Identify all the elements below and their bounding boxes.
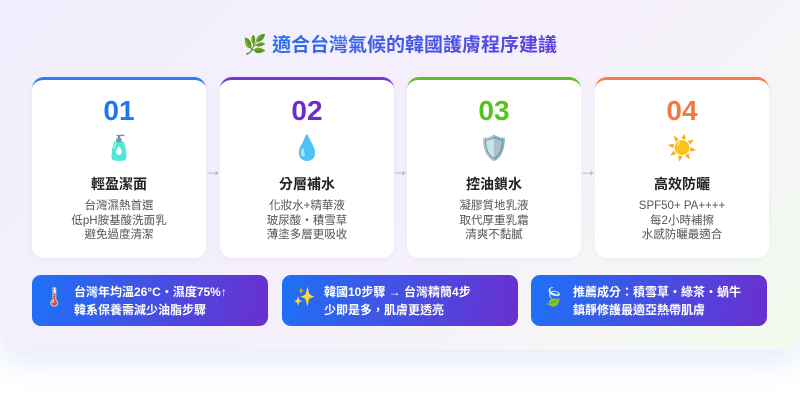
- card 04: 高效防曬: [654, 176, 710, 192]
- arrow: →: [391, 160, 409, 180]
- arrow: →: [204, 160, 222, 180]
- card 04: ☀️: [667, 134, 697, 162]
- tip: ingredients: 🍃: [542, 287, 564, 307]
- tip: ingredients: 鎮靜修護最適亞熱帶肌膚: [573, 303, 705, 317]
- card 04: SPF50+ PA++++: [639, 200, 725, 212]
- arrow: →: [579, 160, 597, 180]
- card 02: 💧: [292, 134, 322, 162]
- tip: climate: 🌡️: [43, 287, 65, 307]
- tip: climate: [32, 275, 268, 326]
- card 01: [32, 77, 206, 258]
- card 03: 取代厚重乳霜: [460, 215, 528, 227]
- tip: climate: 韓系保養需減少油脂步驟: [74, 303, 206, 317]
- card 02: 薄塗多層更吸收: [267, 229, 347, 241]
- card 03: 03: [478, 95, 510, 126]
- card 03: [407, 77, 581, 258]
- tip: steps: 韓國10步驟 → 台灣精簡4步: [324, 285, 471, 299]
- card 02: [220, 77, 394, 258]
- tip: steps: ✨: [293, 287, 315, 307]
- card 03: 凝膠質地乳液: [460, 200, 528, 212]
- card 03: 🛡️: [479, 134, 509, 162]
- card 01: 避免過度清潔: [84, 229, 154, 241]
- card 01: 台灣濕熱首選: [84, 200, 154, 212]
- card 02: 分層補水: [279, 176, 335, 192]
- card 04: 每2小時補擦: [650, 215, 714, 227]
- card 01: 🧴: [104, 134, 134, 162]
- card 03: 控油鎖水: [466, 176, 522, 192]
- title: 🌿 適合台灣氣候的韓國護膚程序建議: [243, 35, 557, 56]
- card 01: 01: [103, 95, 135, 126]
- card 01: 輕盈潔面: [91, 176, 147, 192]
- card 02: 02: [291, 95, 323, 126]
- tip: ingredients: 推薦成分：積雪草・綠茶・蝸牛: [573, 285, 741, 299]
- card 04: 水感防曬最適合: [642, 229, 722, 241]
- card 04: [595, 77, 769, 258]
- tip: ingredients: [531, 275, 767, 326]
- card 01: 低pH胺基酸洗面乳: [71, 215, 167, 227]
- tip: climate: 台灣年均溫26°C・濕度75%↑: [74, 285, 227, 299]
- card 04: 04: [666, 95, 698, 126]
- tip: steps: 少即是多，肌膚更透亮: [324, 303, 444, 317]
- tip: steps: [282, 275, 518, 326]
- card 02: 化妝水+精華液: [269, 200, 345, 212]
- card 03: 清爽不黏膩: [465, 229, 523, 241]
- card 02: 玻尿酸・積雪草: [267, 215, 347, 227]
